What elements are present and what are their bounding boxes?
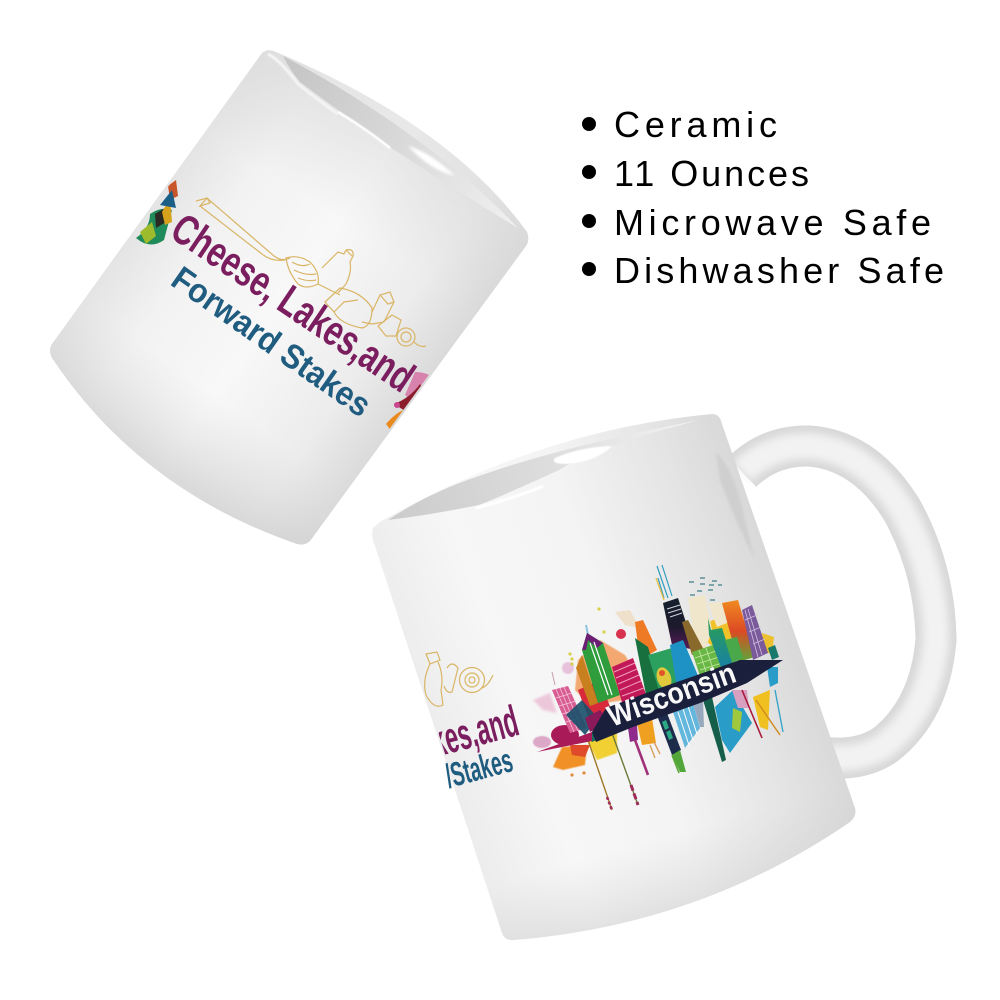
- text: kes, and: kes,and: [426, 697, 524, 767]
- dark green block: [635, 638, 662, 700]
- bullet: Dishwasher Safe: Dishwasher Safe: [614, 250, 944, 291]
- mug handle: [742, 446, 936, 758]
- mug body: [50, 50, 528, 545]
- pink grid tower: [552, 686, 587, 733]
- mug inner rim: [388, 420, 700, 520]
- purple grid tower: [742, 605, 768, 660]
- heading: Cheese, Lakes, and: Cheese, Lakes,and: [162, 204, 423, 402]
- long drips: [588, 690, 783, 810]
- mug: lower-right mug with handle: [372, 414, 936, 940]
- bullet: Microwave Safe: Microwave Safe: [614, 202, 931, 243]
- splash: right paint edge: [386, 372, 429, 429]
- banner: [592, 660, 783, 742]
- feature list: [582, 104, 944, 291]
- tall dark tower: [663, 598, 695, 650]
- text: Stakes: /Stakes: [441, 741, 517, 796]
- skyline artwork: [533, 565, 783, 810]
- banner text: Wisconsin: Wisconsin: [603, 657, 740, 734]
- line art: carton, wedge, yarn: [425, 652, 493, 706]
- bullet: 11 Ounces: 11 Ounces: [614, 153, 809, 194]
- teal right block: [768, 645, 779, 660]
- green peak tower: [582, 633, 620, 703]
- buildings: [552, 565, 779, 735]
- orange red tower: [722, 600, 755, 662]
- teal spire tower: [708, 618, 734, 670]
- line art: chopsticks, bowl, bottle, cheese, yarn: [196, 198, 426, 346]
- red and dark blocks: [578, 680, 612, 722]
- bullet: Ceramic: Ceramic: [614, 104, 777, 145]
- magenta striped block: [612, 658, 648, 706]
- green heat block: [648, 648, 688, 700]
- mug inner rim: [283, 56, 518, 228]
- orange tower: [635, 620, 657, 660]
- paint splashes: [533, 607, 774, 777]
- birds: [689, 578, 722, 600]
- antenna: [657, 565, 672, 598]
- green block: [725, 637, 743, 663]
- below-banner reflections: [585, 690, 770, 772]
- pale towers: [688, 595, 712, 650]
- green grid block: [692, 645, 726, 682]
- splash: left paint edge: [136, 180, 178, 245]
- heading: Forward Stakes: Forward Stakes: [164, 259, 378, 425]
- brown striped tower: [682, 620, 704, 655]
- mug body: [372, 414, 855, 940]
- blue block: [670, 640, 699, 688]
- mug: top-left tilted mug: [50, 50, 528, 545]
- banner tip: [537, 732, 592, 752]
